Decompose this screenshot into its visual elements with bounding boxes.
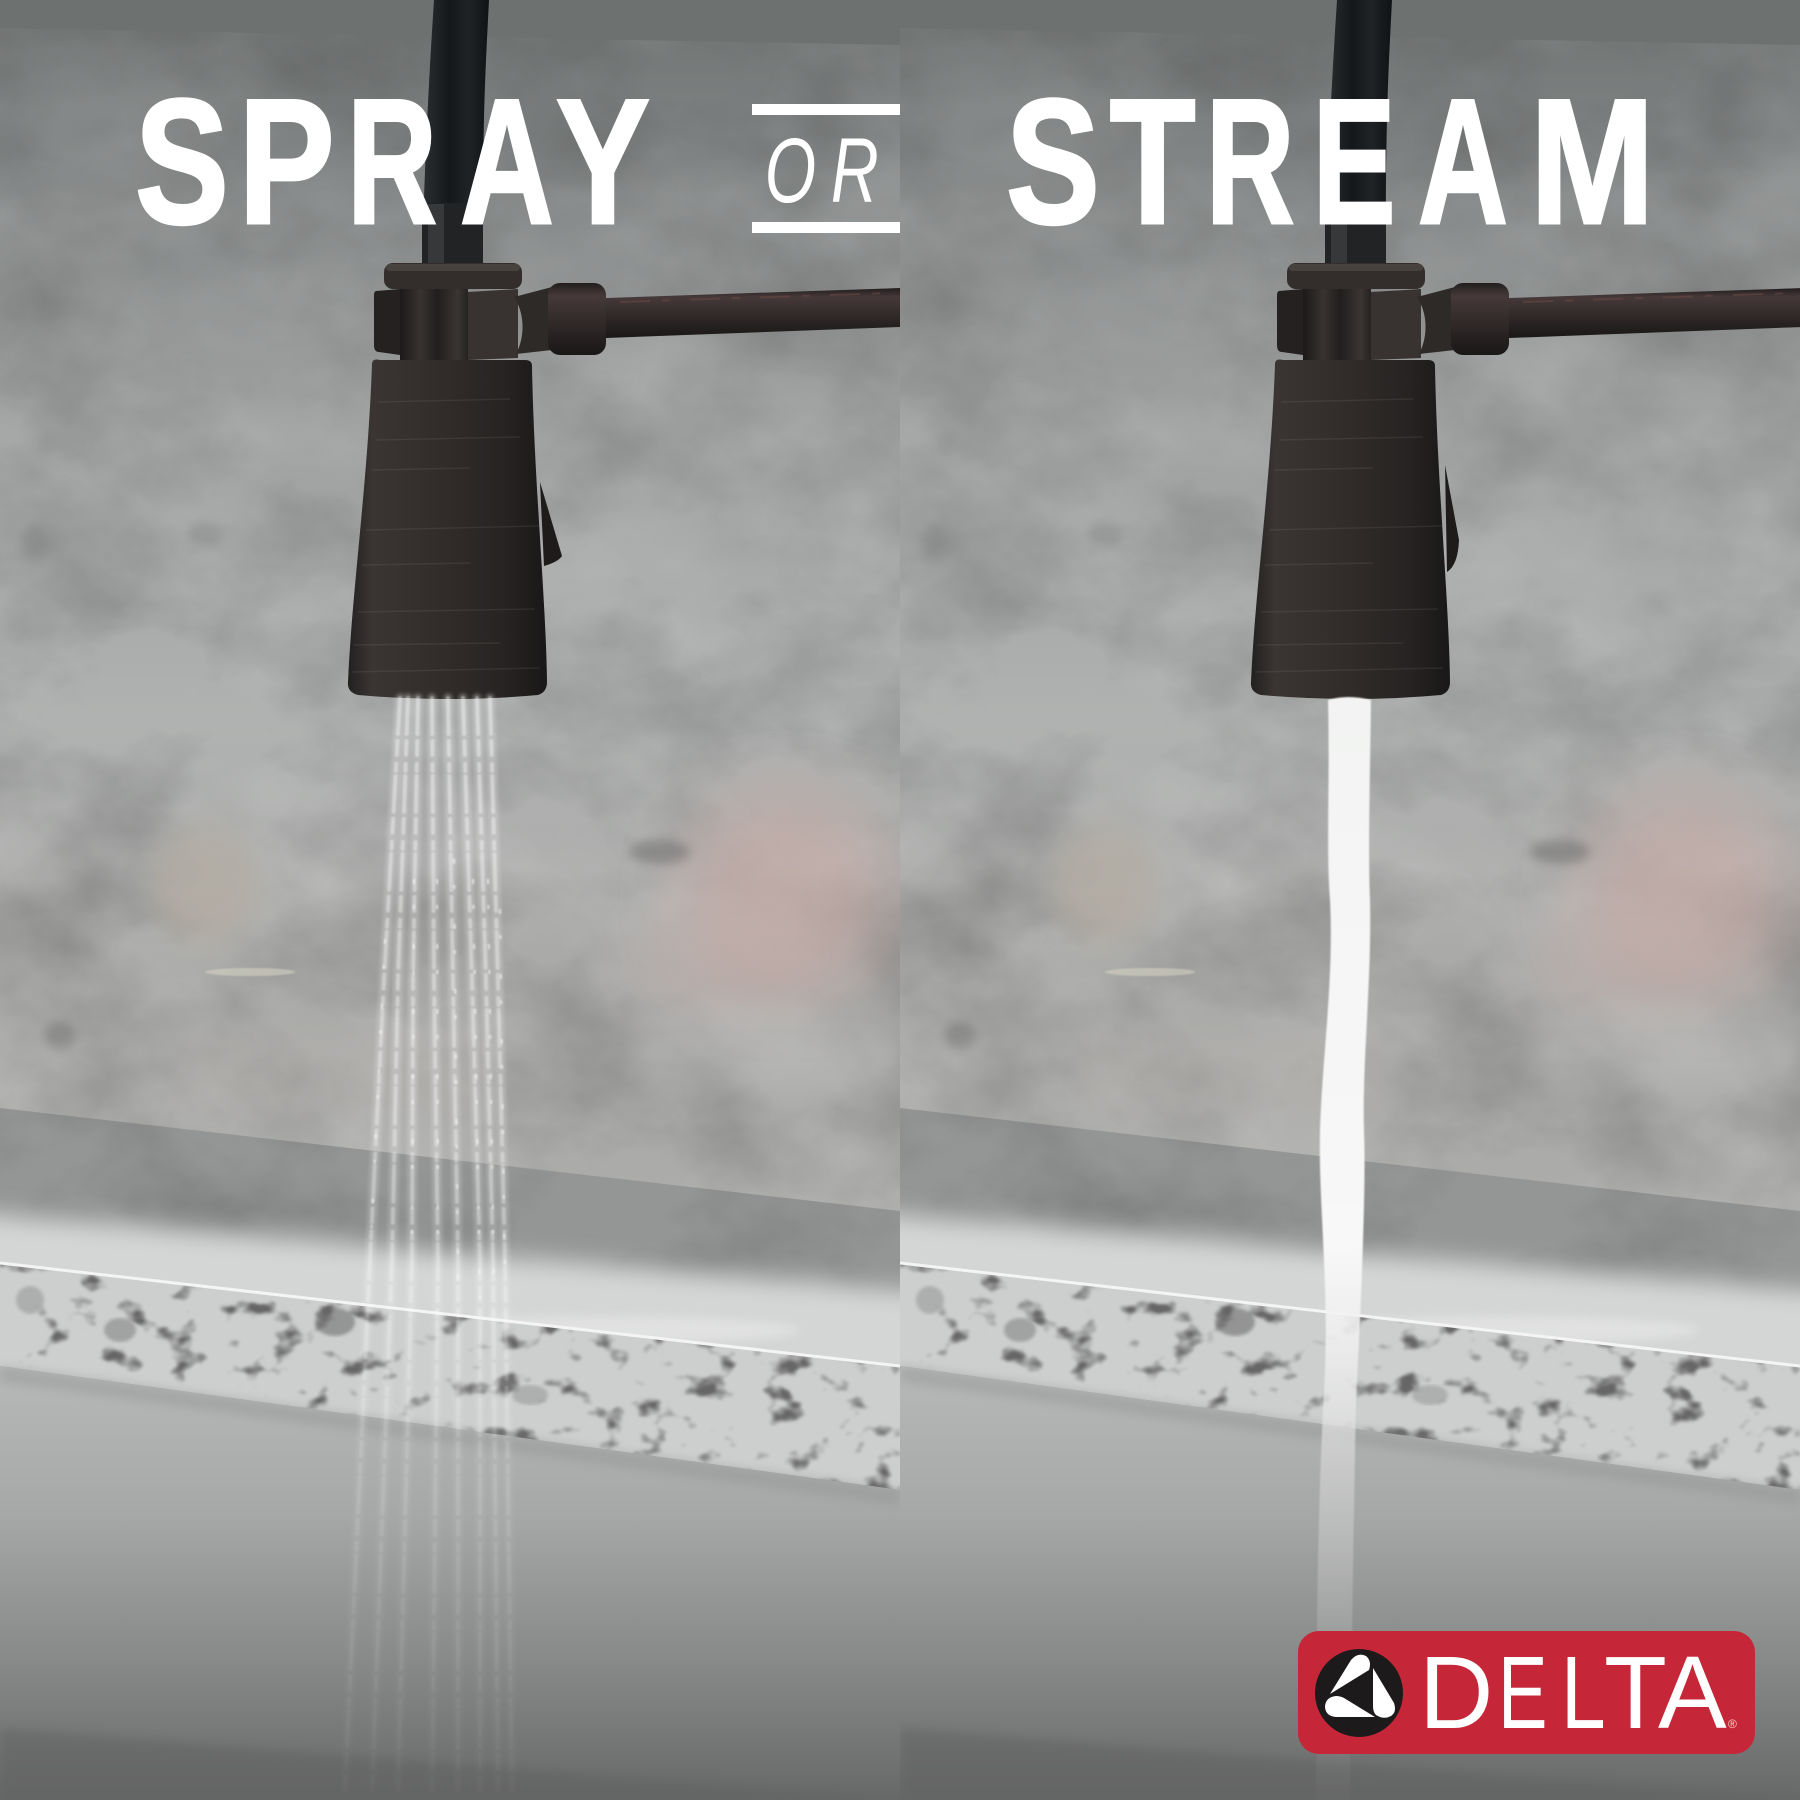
title word: STREAM: M <box>1530 62 1655 261</box>
wordmark DELTA: D <box>1419 1635 1493 1750</box>
wordmark DELTA: T <box>1604 1635 1667 1750</box>
title word: SPRAY: R <box>347 62 437 261</box>
title word: SPRAY: P <box>238 63 335 261</box>
badge: OR between rules: OR <box>765 118 879 222</box>
title word: STREAM: A <box>1418 62 1508 261</box>
title word: STREAM: S <box>1006 62 1100 261</box>
title word: SPRAY: A <box>460 63 554 262</box>
registered mark: ® <box>1728 1717 1737 1731</box>
wordmark DELTA: L <box>1561 1634 1606 1750</box>
wordmark DELTA <box>1419 1634 1727 1751</box>
water spray streams <box>345 698 512 1790</box>
icon: faucet spray head right <box>1251 0 1800 699</box>
panel: spray <box>0 0 980 1800</box>
title word: SPRAY: Y <box>556 62 650 261</box>
title word: STREAM: T <box>1110 62 1196 261</box>
wordmark DELTA: A <box>1658 1635 1727 1750</box>
backdrop: marble kitchen right <box>820 0 1800 1800</box>
title word: SPRAY: S <box>135 62 229 261</box>
panel: stream <box>820 0 1800 1800</box>
backdrop: marble kitchen left <box>0 0 980 1800</box>
solid water stream <box>1316 697 1371 1800</box>
logo: Delta <box>1298 1631 1755 1754</box>
wordmark DELTA: E <box>1498 1636 1547 1751</box>
title word: STREAM: E <box>1312 62 1396 261</box>
title word: SPRAY <box>135 62 650 262</box>
title word: STREAM <box>1006 62 1655 261</box>
title word: STREAM: R <box>1206 64 1294 261</box>
badge: OR between rules <box>752 104 900 233</box>
icon: Delta triangle mark <box>1315 1649 1403 1737</box>
icon: faucet spray head left <box>348 0 900 699</box>
